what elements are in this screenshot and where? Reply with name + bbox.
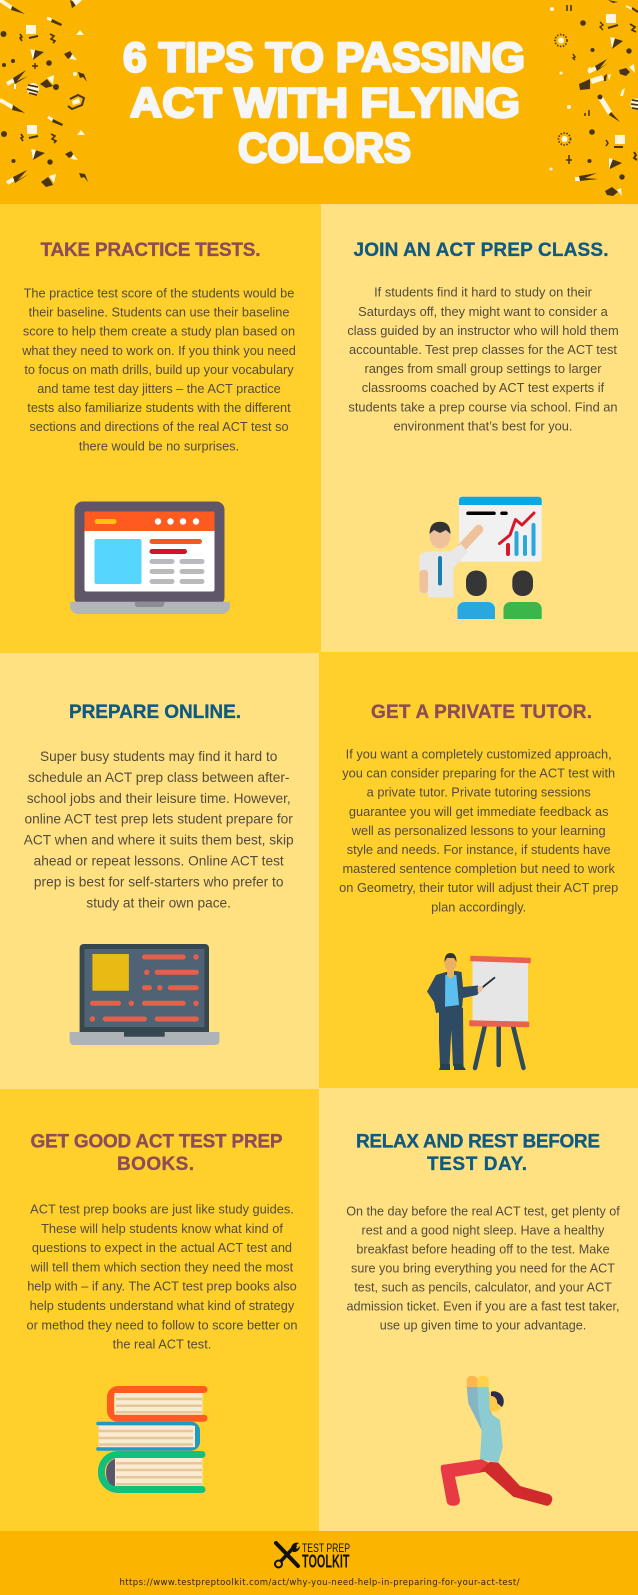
body text: take practice tests: what they need to work on. If you think you need xyxy=(21,343,296,358)
body text: take practice tests: to focus on math drills, build up your vocabulary xyxy=(24,362,294,377)
body text: get a private tutor: If you want a completely customized approach, xyxy=(346,746,612,762)
body text: get good ACT test prep books: or method they need to follow to score better on xyxy=(26,1317,298,1332)
body text: relax and rest before test day: rest and a good night sleep. Have a healthy xyxy=(362,1224,605,1238)
icon: presenter with chart and students xyxy=(420,497,542,619)
body text: relax and rest before test day xyxy=(346,1204,620,1332)
body text: take practice tests xyxy=(21,286,296,453)
heading: relax and rest before test day xyxy=(356,1132,600,1175)
body text: join an ACT prep class: accountable. Test prep classes for the ACT test xyxy=(349,342,617,357)
body text: prepare online: ahead or repeat lessons. Online ACT test xyxy=(34,854,284,868)
body text: get a private tutor: well as personalized lessons to your learning xyxy=(351,823,606,838)
body text: join an ACT prep class: students take a prep course via school. Find an xyxy=(348,399,618,414)
body text: get good ACT test prep books: help with – if any. The ACT test prep books also xyxy=(27,1279,297,1294)
body text: join an ACT prep class: environment that’s best for you. xyxy=(394,418,572,433)
panel: join an ACT prep class xyxy=(321,204,638,652)
body text: get a private tutor: on Geometry, their tutor will adjust their ACT prep xyxy=(339,880,618,895)
body text: take practice tests: tests also familiarize students with the different xyxy=(27,400,291,415)
heading: prepare online: PREPARE ONLINE. xyxy=(69,702,241,723)
body text: prepare online xyxy=(24,749,294,910)
title: 6 TIPS TO PASSING xyxy=(123,34,525,80)
panel: get a private tutor xyxy=(319,652,638,1088)
body text: join an ACT prep class: classrooms coached by ACT test experts if xyxy=(362,380,605,395)
body text: prepare online: ACT when and where it suits them best, skip xyxy=(24,833,294,848)
body text: get a private tutor: a private tutor. Private tutoring sessions xyxy=(367,785,591,800)
body text: relax and rest before test day: test, such as pencils, calculator, and your ACT xyxy=(354,1280,612,1294)
logo: test prep toolkit: TOOLKIT xyxy=(302,1550,350,1572)
body text: take practice tests: there would be no surprises. xyxy=(79,438,239,453)
body text: prepare online: schedule an ACT prep class between after- xyxy=(28,770,289,785)
body text: get good ACT test prep books: ACT test prep books are just like study guides. xyxy=(30,1202,294,1216)
body text: join an ACT prep class: class guided by an instructor who will hold them xyxy=(347,323,619,338)
confetti: right xyxy=(550,0,638,196)
body text: get a private tutor: you can consider preparing for the ACT test with xyxy=(342,766,615,781)
body text: prepare online: online ACT test prep lets student prepare for xyxy=(25,812,293,827)
heading: join an ACT prep class: JOIN AN ACT PREP CLASS. xyxy=(354,240,608,261)
body text: take practice tests: sections and directions of the real ACT test so xyxy=(29,419,289,434)
body text: join an ACT prep class: Saturdays off, they might want to consider a xyxy=(358,304,609,319)
body text: get a private tutor: plan accordingly. xyxy=(431,899,526,914)
title xyxy=(123,34,525,171)
heading: get good ACT test prep books: BOOKS. xyxy=(117,1154,194,1175)
body text: relax and rest before test day: On the day before the real ACT test, get plenty of xyxy=(346,1204,620,1218)
title: ACT WITH FLYING xyxy=(130,79,520,126)
heading: get good ACT test prep books: GET GOOD ACT TEST PREP xyxy=(30,1132,283,1152)
panel: get good ACT test prep books xyxy=(0,1089,319,1531)
header band xyxy=(0,0,638,204)
body text: take practice tests: score to help them create a study plan based on xyxy=(23,324,295,339)
body text: relax and rest before test day: admission ticket. Even if you are a fast test taker, xyxy=(346,1300,620,1314)
icon: stretching figure xyxy=(441,1376,552,1506)
body text: prepare online: Super busy students may find it hard to xyxy=(40,749,278,764)
logo: test prep toolkit: TEST PREP xyxy=(302,1541,350,1555)
body text: take practice tests: and tame test day jitters – the ACT practice xyxy=(37,381,281,396)
body text: join an ACT prep class xyxy=(347,285,619,433)
title: COLORS xyxy=(238,124,411,171)
heading: relax and rest before test day: RELAX AND REST BEFORE xyxy=(356,1132,600,1152)
body text: get good ACT test prep books xyxy=(26,1202,298,1352)
heading: take practice tests: TAKE PRACTICE TESTS. xyxy=(40,240,260,261)
body text: get a private tutor: style and needs. For instance, if students have xyxy=(347,842,611,857)
panel: take practice tests xyxy=(0,204,321,653)
body text: get a private tutor: guarantee you will get immediate feedback as xyxy=(349,804,609,819)
confetti: left xyxy=(0,0,88,187)
panel: relax and rest before test day xyxy=(319,1088,638,1531)
heading: get good ACT test prep books xyxy=(30,1132,283,1175)
body text: get good ACT test prep books: will tell them which section they need the most xyxy=(30,1259,294,1274)
body text: get a private tutor: mastered sentence completion but need to work xyxy=(342,861,616,876)
body text: get good ACT test prep books: questions to expect in the actual ACT test and xyxy=(32,1240,292,1255)
body text: take practice tests: The practice test score of the students would be xyxy=(24,286,294,300)
icon: orange laptop xyxy=(70,502,230,614)
body text: join an ACT prep class: If students find it hard to study on their xyxy=(374,285,593,300)
body text: get good ACT test prep books: help students understand what kind of strategy xyxy=(30,1298,295,1313)
source URL: https://www.testpreptoolkit.com/act/why-you-need-help-in-preparing-for-your-act-test/ xyxy=(120,1578,520,1588)
body text: relax and rest before test day: sure you bring everything you need for the ACT xyxy=(351,1262,615,1276)
body text: relax and rest before test day: use up given time to your advantage. xyxy=(380,1318,586,1332)
body text: prepare online: study at their own pace. xyxy=(86,895,231,910)
icon: teacher at flip chart xyxy=(427,953,530,1070)
body text: get a private tutor xyxy=(339,746,618,914)
footer band xyxy=(0,1531,638,1595)
body text: join an ACT prep class: ranges from small group settings to larger xyxy=(364,361,602,376)
body text: get good ACT test prep books: the real ACT test. xyxy=(113,1337,211,1352)
icon: stack of books xyxy=(96,1386,208,1493)
heading: relax and rest before test day: TEST DAY. xyxy=(427,1154,527,1175)
heading: get a private tutor: GET A PRIVATE TUTOR. xyxy=(371,702,592,723)
panel: prepare online xyxy=(0,653,319,1089)
body text: relax and rest before test day: breakfast before heading off to the test. Make xyxy=(356,1242,610,1256)
body text: prepare online: prep is best for self-starters who prefer to xyxy=(34,874,284,889)
body text: take practice tests: their baseline. Students can use their baseline xyxy=(29,305,289,320)
body text: prepare online: school jobs and their leisure time. However, xyxy=(27,791,291,806)
icon: dark laptop xyxy=(70,944,219,1045)
logo: test prep toolkit xyxy=(275,1541,350,1572)
body text: get good ACT test prep books: These will help students know what kind of xyxy=(41,1221,283,1236)
